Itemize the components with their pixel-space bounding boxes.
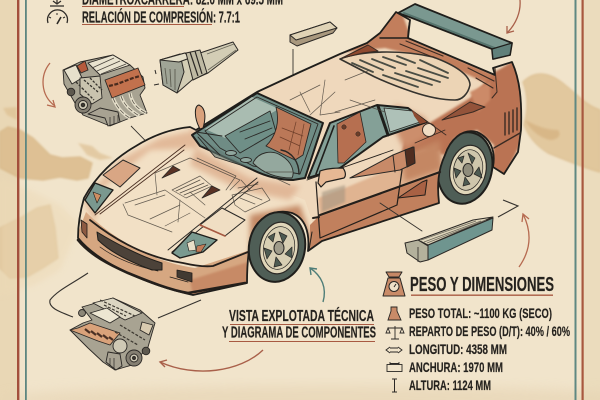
specification: compression ratio: RELACIÓN DE COMPRESIÓN: 7.7:1 bbox=[82, 8, 240, 26]
side air intake bbox=[350, 147, 415, 178]
right border rules bbox=[574, 0, 584, 400]
row: width: ANCHURA: 1970 MM bbox=[409, 359, 503, 375]
caption: exploded view bbox=[222, 306, 376, 342]
side window bbox=[308, 105, 427, 178]
icon: balance bbox=[386, 326, 404, 339]
headlight left bbox=[85, 183, 113, 213]
leader lines bbox=[50, 49, 518, 318]
underline: compression ratio bbox=[82, 24, 212, 26]
door leader line bbox=[380, 203, 422, 231]
seat in side window bbox=[337, 112, 366, 163]
part: intercooler bbox=[405, 217, 493, 262]
hood panel right bbox=[200, 208, 245, 236]
engine specs text bbox=[48, 0, 283, 26]
arrow: right red bbox=[519, 214, 529, 267]
side mirror left stalk bbox=[195, 105, 205, 129]
car illustration bbox=[76, 4, 530, 296]
hood vents bbox=[162, 166, 220, 198]
front grille bbox=[97, 232, 162, 270]
front wheel bbox=[243, 208, 311, 286]
left border rules bbox=[17, 0, 27, 400]
arrow: top right curved bbox=[507, 0, 520, 33]
part: engine bottom bbox=[70, 298, 155, 370]
hood crease bbox=[95, 145, 185, 215]
icon: height bbox=[392, 379, 397, 392]
caption line 2 rule bbox=[229, 340, 375, 342]
body outline bbox=[78, 12, 521, 295]
arrow: bottom curved bbox=[160, 350, 263, 371]
part: transmission bbox=[160, 42, 238, 93]
panel: weight and dimensions bbox=[383, 272, 570, 393]
caption line 1 rule bbox=[230, 324, 374, 326]
rear quarter glass bbox=[384, 108, 420, 132]
caption line 1: VISTA EXPLOTADA TÉCNICA bbox=[229, 306, 374, 325]
leader ticks near transmission bbox=[154, 70, 159, 85]
bumper lines bbox=[78, 220, 248, 293]
icon: length bbox=[386, 347, 402, 353]
right hood crease bbox=[168, 178, 258, 252]
arrow: teal pointer bbox=[310, 268, 324, 302]
hood exploded line drawing bbox=[123, 70, 385, 232]
window frame bbox=[316, 126, 334, 174]
icon: compression gauge bbox=[48, 10, 68, 24]
rear spoiler bbox=[398, 4, 512, 59]
door lines bbox=[307, 150, 440, 250]
car body shell bbox=[78, 12, 521, 295]
icon: weighing scale bbox=[383, 272, 405, 296]
rear quarter shadow bbox=[412, 110, 427, 124]
heading rule bbox=[411, 294, 553, 296]
part: small bar top bbox=[290, 22, 337, 46]
mirror bbox=[318, 168, 345, 187]
engine cover bbox=[340, 52, 470, 100]
windshield bbox=[192, 93, 323, 180]
row: height: ALTURA: 1124 MM bbox=[409, 377, 491, 393]
underline: bore and stroke bbox=[82, 6, 184, 8]
rear vents and lines bbox=[342, 41, 520, 148]
icon: width bbox=[387, 362, 402, 372]
icon: bore and stroke bbox=[50, 0, 64, 6]
rear wheel bbox=[431, 127, 499, 209]
window pillar bbox=[378, 106, 388, 135]
icon: weight bbox=[388, 307, 401, 320]
caption line 2: Y DIAGRAMA DE COMPONENTES bbox=[222, 324, 376, 342]
row: length: LONGITUD: 4358 MM bbox=[409, 341, 507, 357]
arrow: left curved red bbox=[43, 63, 55, 107]
hood panel left bbox=[103, 160, 140, 187]
windshield sky and interior bbox=[196, 97, 318, 178]
headlight right bbox=[172, 232, 217, 258]
spoiler support inner edge bbox=[380, 20, 410, 38]
part: engine top left bbox=[63, 55, 147, 126]
body colour washes bbox=[76, 8, 530, 296]
